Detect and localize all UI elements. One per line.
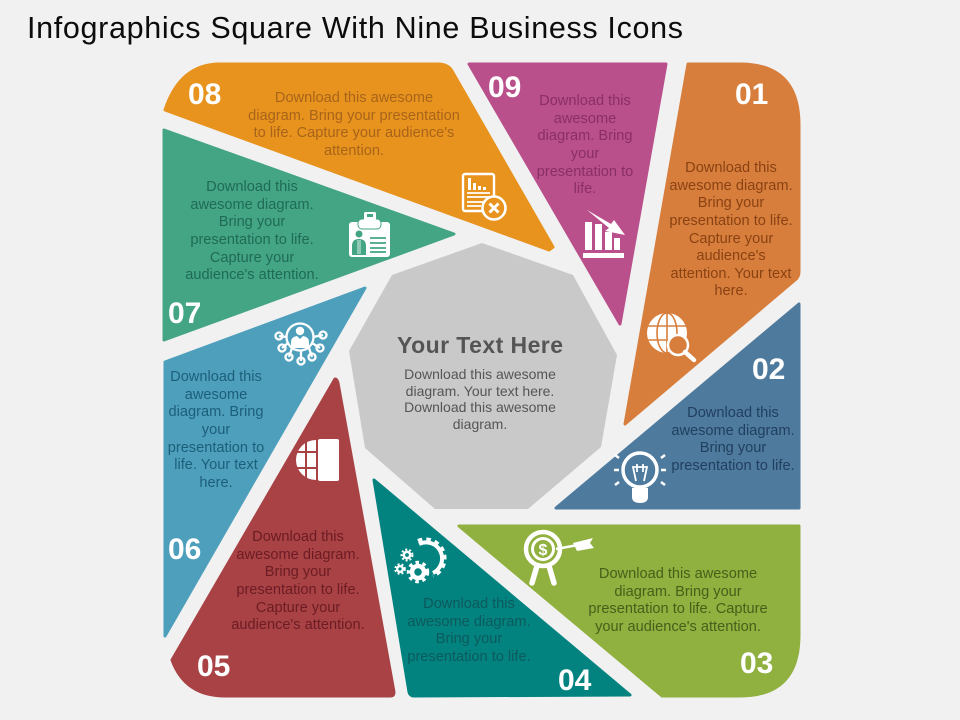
panel: 02 xyxy=(556,304,799,508)
text 01: Download this xyxy=(685,160,777,176)
text 06: Download this xyxy=(170,369,262,385)
text 09: Download this xyxy=(539,93,631,109)
panel: center octagon xyxy=(349,243,617,509)
text 09: diagram. Bring xyxy=(538,128,632,144)
text 04: presentation to life. xyxy=(407,649,531,665)
shape 07 xyxy=(164,130,454,340)
text 02: Bring your xyxy=(700,440,766,456)
panel: 08 xyxy=(165,64,553,250)
text 09: life. xyxy=(574,181,596,197)
text 04: Bring your xyxy=(436,631,502,647)
number 08: 08 xyxy=(188,78,221,111)
text 01: audience's xyxy=(696,248,766,264)
text 03: presentation to life. Capture xyxy=(588,601,768,617)
shape 02 xyxy=(556,304,799,508)
text 05: Capture your xyxy=(256,600,340,616)
shape 05 xyxy=(172,379,394,696)
text 03: your audience's attention. xyxy=(595,619,761,635)
shape 08 xyxy=(165,64,553,250)
center text: diagram. Your text here. xyxy=(406,383,554,399)
number 09: 09 xyxy=(488,71,521,104)
text 08: attention. xyxy=(324,143,384,159)
panel: 03 xyxy=(459,526,799,696)
text 07: Capture your xyxy=(210,250,294,266)
number 03: 03 xyxy=(740,647,773,680)
icon: light bulb xyxy=(614,453,666,503)
text 06: diagram. Bring xyxy=(169,404,263,420)
panel: 04 xyxy=(374,480,630,697)
shape 06 xyxy=(165,288,365,636)
text 05: Download this xyxy=(252,529,344,545)
number 06: 06 xyxy=(168,533,201,566)
icon: card and globe xyxy=(296,439,339,481)
text 06: your xyxy=(202,422,230,438)
center text: diagram. xyxy=(453,416,507,432)
text 09: awesome xyxy=(554,111,616,127)
number 02: 02 xyxy=(752,353,785,386)
text 02: Download this xyxy=(687,405,779,421)
text 06: here. xyxy=(199,475,233,491)
center text: Download this awesome xyxy=(404,399,556,415)
text 01: presentation to life. xyxy=(669,213,793,229)
text 01: Bring your xyxy=(698,195,764,211)
shape 04 xyxy=(374,480,630,696)
text 08: diagram. Bring your presentation xyxy=(248,108,460,124)
panel: 06 xyxy=(165,288,365,636)
panel: 09 xyxy=(469,64,666,324)
icon: report with cross xyxy=(463,174,506,220)
center shape xyxy=(349,243,617,509)
text 09: your xyxy=(571,146,599,162)
number 04: 04 xyxy=(558,664,592,697)
center text: Download this awesome xyxy=(404,366,556,382)
number 01: 01 xyxy=(735,78,768,111)
text 03: Download this awesome xyxy=(599,566,757,582)
text 06: awesome xyxy=(185,387,247,403)
text 06: presentation to xyxy=(168,440,264,456)
icon: gears xyxy=(395,539,445,582)
shape 09 xyxy=(469,64,666,324)
panel: 05 xyxy=(172,379,394,696)
text 08: Download this awesome xyxy=(275,90,433,106)
text 07: presentation to life. xyxy=(190,232,314,248)
text 05: awesome diagram. xyxy=(236,547,360,563)
shape 03 xyxy=(459,526,799,696)
shape 01 xyxy=(625,64,799,424)
text 01: attention. Your text xyxy=(671,266,791,282)
text 07: awesome diagram. xyxy=(190,197,314,213)
text 01: awesome diagram. xyxy=(669,178,793,194)
text 02: awesome diagram. xyxy=(671,423,795,439)
text 07: Download this xyxy=(206,179,298,195)
icon: falling bar chart xyxy=(583,210,625,258)
text 07: Bring your xyxy=(219,214,285,230)
icon: people network xyxy=(276,324,326,364)
text 05: presentation to life. xyxy=(236,582,360,598)
panel: 01 xyxy=(625,64,799,424)
text 03: diagram. Bring your xyxy=(614,584,742,600)
text 09: presentation to xyxy=(537,164,633,180)
title: Infographics Square With Nine Business Icons xyxy=(27,11,683,45)
number 05: 05 xyxy=(197,650,230,683)
text 07: audience's attention. xyxy=(185,267,319,283)
panel: 07 xyxy=(164,130,454,340)
text 06: life. Your text xyxy=(174,457,258,473)
icon: globe with magnifier xyxy=(647,313,694,360)
center heading: Your Text Here xyxy=(397,332,563,358)
text 04: Download this xyxy=(423,596,515,612)
icon: dollar target with dart: $ xyxy=(539,542,548,559)
text 05: Bring your xyxy=(265,564,331,580)
number 07: 07 xyxy=(168,297,201,330)
text 08: to life. Capture your audience's xyxy=(254,125,454,141)
text 02: presentation to life. xyxy=(671,458,795,474)
text 04: awesome diagram. xyxy=(407,614,531,630)
text 01: Capture your xyxy=(689,231,773,247)
text 01: here. xyxy=(714,283,748,299)
text 05: audience's attention. xyxy=(231,617,365,633)
icon: dollar target with dart xyxy=(526,532,594,583)
icon: id badge xyxy=(349,212,390,257)
